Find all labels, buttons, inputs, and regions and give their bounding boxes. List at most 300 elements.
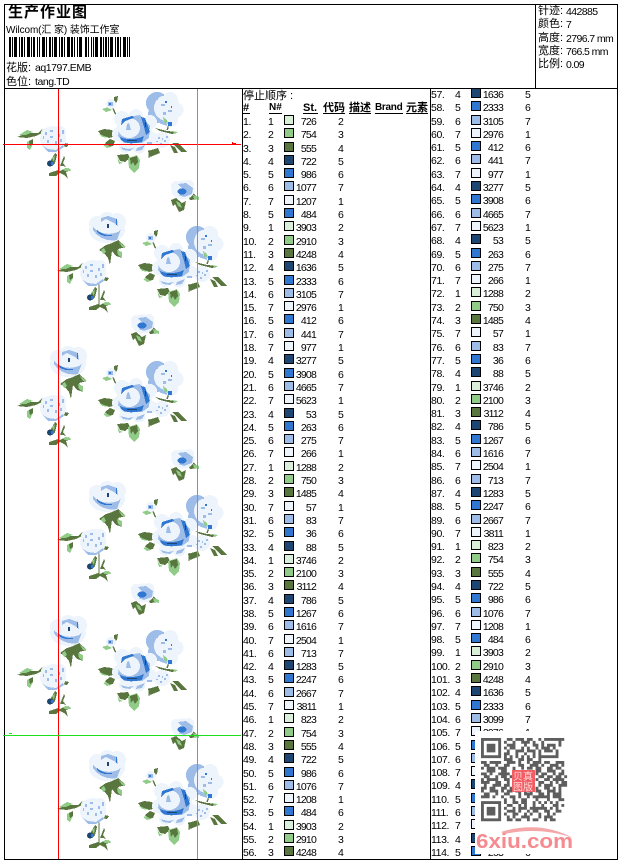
stop sequence table, first column: 4.: [243, 156, 251, 168]
alignment line: vertical green: [197, 89, 198, 859]
stop sequence table, first column: 11.: [243, 249, 256, 261]
stop sequence table, first column: 3: [268, 143, 273, 155]
stop sequence table, second column: 3: [455, 674, 460, 686]
stop sequence table, first column: 35.: [243, 568, 256, 580]
stop sequence table, second column: 108.: [431, 767, 450, 779]
stop sequence table, second column: 94.: [431, 581, 444, 593]
stop sequence table, second column: 7: [455, 169, 460, 181]
stop sequence table, second column: 73.: [431, 302, 444, 314]
stop sequence table, second column: 1: [525, 328, 530, 340]
stop sequence table, first column: 4: [268, 595, 273, 607]
stop sequence table, first column: 28.: [243, 475, 256, 487]
stitch count: [538, 5, 598, 18]
stop sequence table, first column: 1076: [296, 781, 316, 793]
stop sequence table, first column: 33.: [243, 542, 256, 554]
stop sequence table, second column: 5: [455, 741, 460, 753]
stop sequence table, second column: 3908: [483, 794, 503, 806]
stop sequence table, second column: 2: [525, 647, 530, 659]
stop sequence table, second column: 1485: [483, 315, 503, 327]
stop sequence table, second column: 5: [455, 249, 460, 261]
stop sequence table, second column: 3105: [483, 116, 503, 128]
stop sequence table, first column: 4248: [296, 847, 316, 859]
stop sequence table, second column: 62.: [431, 155, 444, 167]
stop sequence table, first column: 754: [301, 129, 316, 141]
stop sequence table, first column: 5: [338, 595, 343, 607]
stop sequence table, second column: 3: [525, 395, 530, 407]
stop sequence table, second column: 83.: [431, 435, 444, 447]
stop sequence heading: 停止顺序 :: [243, 90, 293, 102]
stop sequence table, first column: 2: [268, 236, 273, 248]
stop sequence table, first column: 1: [338, 794, 343, 806]
stop sequence table, second column: 4665: [483, 209, 503, 221]
stop sequence table, second column: 58.: [431, 102, 444, 114]
stitch count: 针迹:: [538, 5, 563, 17]
stop sequence table, first column: 3277: [296, 355, 316, 367]
stop sequence table, first column: 24.: [243, 422, 256, 434]
stop sequence table, first column: 1: [268, 222, 273, 234]
stop sequence table, first column: 30.: [243, 502, 256, 514]
stop sequence table, first column: 2: [338, 462, 343, 474]
site logo: 6xiu.com: 6xiu.com: [476, 831, 573, 853]
stop sequence table, second column: 4: [455, 235, 460, 247]
stop sequence table, second column: 1: [525, 222, 530, 234]
alignment line: vertical red: [58, 89, 59, 859]
stop sequence table, first column: 27.: [243, 462, 256, 474]
color position: tang.TD: [35, 76, 69, 88]
stop sequence table, first column: 5: [268, 315, 273, 327]
stop sequence table, second column: 1636: [483, 687, 503, 699]
stop sequence table, first column: 5: [268, 768, 273, 780]
stop sequence table, first column: 4: [338, 488, 343, 500]
stop sequence table, second column: 1: [525, 767, 530, 779]
stop sequence table, first column: 46.: [243, 714, 256, 726]
stop sequence table, first column: 484: [301, 807, 316, 819]
stop sequence table, first column: 5: [338, 355, 343, 367]
motif: single bloom 3: [171, 449, 199, 481]
stop sequence table, second column: 2: [525, 382, 530, 394]
motif: large rose cluster 3: [98, 361, 187, 442]
stop sequence table, first column: 7: [268, 502, 273, 514]
stop sequence table, second column: 3908: [483, 195, 503, 207]
stop sequence table, second column: 977: [488, 767, 503, 779]
pattern file name: aq1797.EMB: [35, 62, 91, 74]
stop sequence table, second column: 82.: [431, 421, 444, 433]
stop sequence table, first column: 6: [268, 329, 273, 341]
stop sequence table, second column: 4: [455, 780, 460, 792]
statistics box: 766.5 mm: [566, 46, 608, 58]
stop sequence table, first column: 3903: [296, 222, 316, 234]
stop sequence table, second column: 4: [455, 687, 460, 699]
column: number: #: [243, 102, 249, 114]
stop sequence table, second column: 6: [525, 594, 530, 606]
column: brand: Brand: [375, 102, 402, 113]
stop sequence table, first column: 3105: [296, 289, 316, 301]
stop sequence table, second column: 89.: [431, 514, 444, 526]
stop sequence table, second column: 5: [455, 794, 460, 806]
stop sequence table, second column: 1: [525, 621, 530, 633]
column: stitches: St.: [303, 102, 317, 114]
stop sequence table, first column: 6: [338, 807, 343, 819]
stop sequence table, first column: 4248: [296, 249, 316, 261]
stop sequence table, first column: 4: [268, 754, 273, 766]
stop sequence table, second column: 1: [455, 541, 460, 553]
stop sequence table, first column: 1616: [296, 621, 316, 633]
color position: 色位:: [6, 76, 31, 88]
stop sequence table, first column: 7: [338, 435, 343, 447]
stop sequence table, first column: 2: [268, 568, 273, 580]
stop sequence table, second column: 2: [455, 661, 460, 673]
stop sequence table, first column: 2: [338, 555, 343, 567]
stop sequence table, first column: 36.: [243, 581, 256, 593]
stop sequence table, first column: 12.: [243, 262, 256, 274]
stop sequence table, first column: 7: [338, 382, 343, 394]
marker: small green tick: [9, 733, 12, 734]
stop sequence table, first column: 2910: [296, 236, 316, 248]
stop sequence table, first column: 6: [338, 209, 343, 221]
stop sequence table, second column: 412: [488, 741, 503, 753]
stop sequence table, first column: 15.: [243, 302, 256, 314]
stop sequence table, second column: 5: [525, 368, 530, 380]
stop sequence table, second column: 263: [488, 847, 503, 859]
stop sequence table, second column: 1: [525, 129, 530, 141]
stop sequence table, second column: 7: [455, 621, 460, 633]
stop sequence table, second column: 6: [525, 741, 530, 753]
stop sequence table, second column: 113.: [431, 834, 449, 846]
stop sequence table, second column: 5: [455, 435, 460, 447]
stop sequence table, first column: 1: [338, 302, 343, 314]
stop sequence table, second column: 5: [455, 594, 460, 606]
stop sequence table, second column: 7: [525, 155, 530, 167]
stop sequence table, second column: 3277: [483, 182, 503, 194]
stop sequence table, second column: 484: [488, 634, 503, 646]
stop sequence table, first column: 726: [301, 116, 316, 128]
stop sequence table, first column: 1: [338, 196, 343, 208]
stop sequence table, first column: 6: [338, 674, 343, 686]
stop sequence table, second column: 57.: [431, 89, 444, 101]
stop sequence table, second column: 1208: [483, 621, 503, 633]
stop sequence table, first column: 441: [301, 329, 316, 341]
stop sequence table, second column: 111.: [431, 807, 448, 819]
stop sequence table, first column: 2: [338, 821, 343, 833]
stop sequence table, second column: 2: [455, 395, 460, 407]
stop sequence table, first column: 38.: [243, 608, 256, 620]
stop sequence table, first column: 1288: [296, 462, 316, 474]
stop sequence table, second column: 7: [455, 129, 460, 141]
motif: small rose sprig 6: [57, 798, 111, 851]
stop sequence table, second column: 3099: [483, 714, 503, 726]
stop sequence table, first column: 6: [338, 768, 343, 780]
stop sequence table, first column: 3: [338, 568, 343, 580]
stop sequence table, first column: 5: [338, 156, 343, 168]
stop sequence table, second column: 64.: [431, 182, 444, 194]
motif: small rose sprig 5: [17, 664, 71, 717]
stop sequence table, first column: 555: [301, 741, 316, 753]
stop sequence table, first column: 3112: [297, 581, 316, 593]
stop sequence table, first column: 5: [268, 276, 273, 288]
stop sequence table, second column: 5: [455, 142, 460, 154]
stop sequence table, first column: 7: [268, 701, 273, 713]
stop sequence table, second column: 3: [455, 568, 460, 580]
stop sequence table, first column: 823: [301, 714, 316, 726]
stop sequence table, second column: 67.: [431, 222, 444, 234]
stop sequence table, first column: 412: [301, 315, 316, 327]
stop sequence table, second column: 102.: [431, 687, 450, 699]
motif: medium rose 4: [50, 615, 87, 668]
statistics box: 442885: [566, 6, 597, 18]
stop sequence table, first column: 2247: [296, 674, 316, 686]
red seal logo: 贝真: [513, 770, 533, 783]
scale: [538, 58, 584, 71]
stop sequence table, first column: 6: [268, 289, 273, 301]
motif: small rose sprig 2: [57, 260, 111, 313]
stop sequence table, first column: 3: [338, 475, 343, 487]
stop sequence table, first column: 266: [301, 448, 316, 460]
stop sequence table, second column: 4: [455, 421, 460, 433]
stop sequence table, second column: 3: [455, 315, 460, 327]
stop sequence table, first column: 4: [338, 249, 343, 261]
motif: large rose cluster 4: [138, 495, 227, 576]
stop sequence table, first column: 5: [268, 369, 273, 381]
stop sequence table, second column: 90.: [431, 528, 444, 540]
stop sequence table, second column: 109.: [431, 780, 450, 792]
stop sequence table, first column: 7.: [243, 196, 251, 208]
stop sequence table, second column: 6: [525, 634, 530, 646]
stop sequence table, first column: 29.: [243, 488, 256, 500]
motif: single bloom 4: [131, 583, 159, 615]
stop sequence table, first column: 275: [301, 435, 316, 447]
stop sequence table, first column: 5: [338, 262, 343, 274]
statistics box: 7: [566, 19, 571, 31]
stop sequence table, second column: 7: [525, 608, 530, 620]
motif: large rose cluster 1: [98, 92, 187, 173]
stop sequence table, first column: 83: [306, 515, 316, 527]
height: 高度:: [538, 32, 563, 44]
stop sequence table, second column: 65.: [431, 195, 444, 207]
stop sequence table, first column: 7: [338, 515, 343, 527]
stop sequence table, second column: 3: [525, 302, 530, 314]
stop sequence table, first column: 3: [268, 741, 273, 753]
stop sequence table, first column: 5: [268, 169, 273, 181]
stop sequence table, first column: 4: [338, 143, 343, 155]
stop sequence table, first column: 6: [338, 369, 343, 381]
stop sequence table, second column: 5: [455, 701, 460, 713]
stop sequence table, second column: 7: [525, 475, 530, 487]
stop sequence table, first column: 31.: [243, 515, 256, 527]
stop sequence table, second column: 2: [455, 554, 460, 566]
stop sequence table, second column: 5: [525, 89, 530, 101]
stop sequence table, first column: 23.: [243, 409, 256, 421]
stop sequence table, first column: 2910: [296, 834, 316, 846]
stop sequence table, first column: 5: [338, 754, 343, 766]
stop sequence table, first column: 1: [338, 448, 343, 460]
stop sequence table, second column: 2976: [483, 129, 503, 141]
stop sequence table, second column: 104.: [431, 714, 450, 726]
stop sequence table, first column: 6: [268, 515, 273, 527]
stop sequence table, second column: 6: [455, 209, 460, 221]
stop sequence table, first column: 2504: [296, 635, 316, 647]
stop sequence table, second column: 6: [455, 448, 460, 460]
stop sequence table, second column: 63.: [431, 169, 444, 181]
stop sequence table, first column: 25.: [243, 435, 256, 447]
stop sequence table, first column: 2: [268, 129, 273, 141]
stop sequence table, second column: 3746: [483, 382, 503, 394]
stop sequence table, first column: 53.: [243, 807, 256, 819]
stop sequence table, first column: 7: [338, 781, 343, 793]
stop sequence table, second column: 77.: [431, 355, 444, 367]
stop sequence table, first column: 41.: [243, 648, 256, 660]
stop sequence table, first column: 5: [268, 807, 273, 819]
stop sequence table, first column: 36: [306, 528, 316, 540]
stop sequence table, second column: 98.: [431, 634, 444, 646]
stop sequence table, first column: 4: [268, 156, 273, 168]
stop sequence table, first column: 2976: [296, 302, 316, 314]
stop sequence table, first column: 986: [301, 169, 316, 181]
stop sequence table, first column: 555: [301, 143, 316, 155]
stop sequence table, second column: 1616: [483, 448, 503, 460]
stop sequence table, second column: 3112: [484, 408, 503, 420]
stop sequence table, second column: 4: [455, 488, 460, 500]
stop sequence table, second column: 2667: [483, 514, 503, 526]
stop sequence table, first column: 50.: [243, 768, 256, 780]
stop sequence table, second column: 7: [525, 754, 530, 766]
stop sequence table, second column: 7: [525, 342, 530, 354]
stop sequence table, second column: 6: [455, 514, 460, 526]
QR code: [481, 739, 567, 820]
stop sequence table, second column: 84.: [431, 448, 444, 460]
color count: 颜色:: [538, 18, 563, 30]
stop sequence table, first column: 1: [268, 714, 273, 726]
stop sequence table, first column: 1267: [296, 608, 316, 620]
stop sequence table, first column: 1: [338, 395, 343, 407]
stop sequence table, first column: 49.: [243, 754, 256, 766]
stop sequence table, second column: 6: [455, 155, 460, 167]
stop sequence table, first column: 7: [338, 289, 343, 301]
stop sequence table, second column: 6: [455, 262, 460, 274]
color position: [6, 76, 70, 88]
stop sequence table, second column: 5: [455, 195, 460, 207]
stop sequence table, second column: 6: [455, 475, 460, 487]
stop sequence table, first column: 6: [268, 382, 273, 394]
stop sequence table, first column: 44.: [243, 688, 256, 700]
stop sequence table, second column: 99.: [431, 647, 444, 659]
stop sequence table, first column: 7: [268, 794, 273, 806]
stop sequence table, second column: 57: [493, 328, 503, 340]
stop sequence table, first column: 5: [268, 528, 273, 540]
stop sequence table, first column: 2667: [296, 688, 316, 700]
stop sequence table, second column: 61.: [431, 142, 444, 154]
stop sequence table, second column: 4: [525, 315, 530, 327]
stop sequence table, second column: 96.: [431, 608, 444, 620]
stop sequence table, second column: 81.: [431, 408, 444, 420]
stop sequence table, first column: 6.: [243, 182, 251, 194]
stop sequence table, second column: 72.: [431, 288, 444, 300]
stop sequence table, first column: 22.: [243, 395, 256, 407]
stop sequence table, first column: 263: [301, 422, 316, 434]
stop sequence table, second column: 5: [525, 834, 530, 846]
stop sequence table, second column: 107.: [431, 754, 450, 766]
stop sequence table, first column: 3: [338, 834, 343, 846]
stop sequence table, second column: 7: [455, 275, 460, 287]
stop sequence table, second column: 110.: [431, 794, 449, 806]
stop sequence table, first column: 1: [268, 555, 273, 567]
stop sequence table, first column: 6: [268, 781, 273, 793]
stop sequence table, second column: 5: [455, 847, 460, 859]
stop sequence table, first column: 3: [338, 129, 343, 141]
stop sequence table, first column: 5.: [243, 169, 251, 181]
stop sequence table, second column: 4: [455, 89, 460, 101]
stop sequence table, second column: 4665: [483, 807, 503, 819]
title: 生产作业图: [8, 4, 88, 21]
stop sequence table, first column: 20.: [243, 369, 256, 381]
stop sequence table, second column: 86.: [431, 475, 444, 487]
stop sequence table, second column: 6: [525, 195, 530, 207]
stop sequence table, first column: 10.: [243, 236, 256, 248]
subtitle: studio name: Wilcom(汇 家) 装饰工作室: [6, 25, 119, 36]
stop sequence table, first column: 16.: [243, 315, 256, 327]
stop sequence table, second column: 6: [455, 608, 460, 620]
stop sequence table, first column: 4: [338, 847, 343, 859]
stop sequence table, second column: 103.: [431, 701, 450, 713]
stop sequence table, first column: 5623: [296, 395, 316, 407]
stop sequence table, second column: 93.: [431, 568, 444, 580]
stop sequence table, first column: 1: [268, 821, 273, 833]
stop sequence table, second column: 53: [493, 834, 503, 846]
stop sequence table, first column: [243, 115, 344, 859]
stop sequence table, first column: 484: [301, 209, 316, 221]
stop sequence table, first column: 4: [268, 661, 273, 673]
stop sequence table, first column: 1077: [296, 182, 316, 194]
stop sequence table, second column: 4: [525, 568, 530, 580]
stop sequence table, second column: 6: [525, 355, 530, 367]
stop sequence table, first column: 37.: [243, 595, 256, 607]
stop sequence table, second column: 100.: [431, 661, 450, 673]
stop sequence table, second column: 83: [493, 342, 503, 354]
stop sequence table, second column: 95.: [431, 594, 444, 606]
motif: medium rose 2: [50, 346, 87, 399]
stop sequence table, first column: 2333: [296, 276, 316, 288]
stop sequence table, first column: 45.: [243, 701, 256, 713]
stop sequence table, first column: 7: [338, 621, 343, 633]
stop sequence table, second column: 4: [455, 182, 460, 194]
stop sequence table, first column: 1636: [296, 262, 316, 274]
stop sequence table, second column: 5623: [483, 222, 503, 234]
stop sequence table, first column: 47.: [243, 728, 256, 740]
stop sequence table, first column: 4: [268, 355, 273, 367]
stop sequence table, second column: 114.: [431, 847, 449, 859]
stop sequence table, second column: 4248: [483, 674, 503, 686]
stop sequence table, second column: 76.: [431, 342, 444, 354]
stop sequence table, first column: 5: [338, 409, 343, 421]
stop sequence table, second column: 2504: [483, 461, 503, 473]
table header row: [243, 102, 428, 114]
stop sequence table, second column: 7: [525, 807, 530, 819]
stop sequence table, second column: 5: [525, 488, 530, 500]
stop sequence table, second column: 7: [525, 714, 530, 726]
stop sequence table, first column: 3908: [296, 369, 316, 381]
motif: single bloom 1: [171, 180, 199, 212]
stop sequence table, second column: 7: [525, 262, 530, 274]
stop sequence table, first column: 56.: [243, 847, 256, 859]
statistics box: 2796.7 mm: [566, 33, 613, 45]
stop sequence table, first column: 4: [268, 409, 273, 421]
stop sequence table, second column: 2976: [483, 727, 503, 739]
stop sequence table, second column: 263: [488, 249, 503, 261]
motif: small rose sprig 3: [17, 395, 71, 448]
stop sequence table, first column: 5: [268, 209, 273, 221]
column: needle: N#: [269, 102, 282, 113]
stop sequence table, second column: 5: [525, 780, 530, 792]
stop sequence table, second column: 66.: [431, 209, 444, 221]
